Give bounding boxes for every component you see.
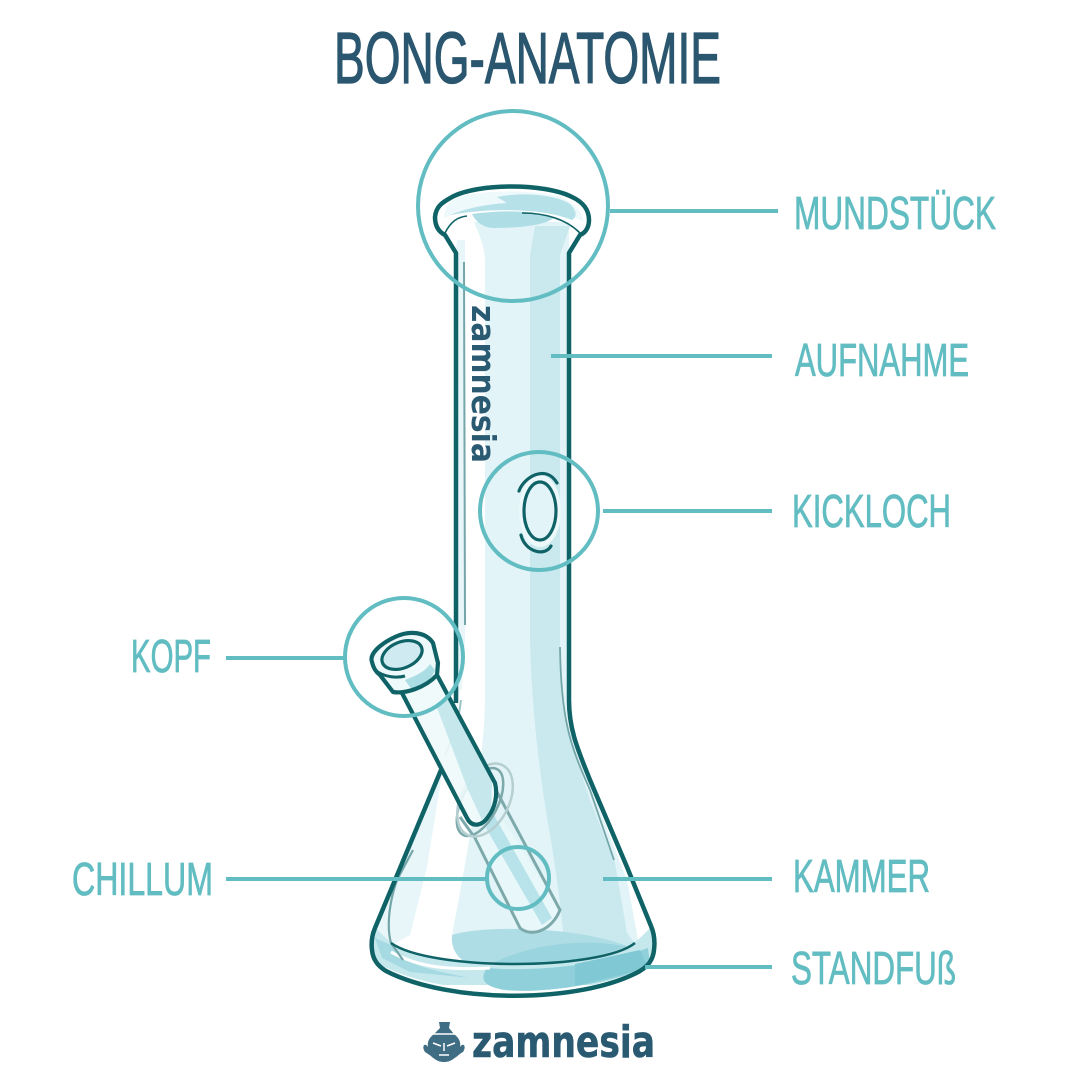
wordmark: zamnesia — [472, 1017, 655, 1068]
bowl — [372, 633, 438, 692]
callout: Kopf — [131, 598, 463, 716]
water pool — [452, 928, 626, 962]
callout: Aufnahme — [551, 334, 969, 386]
icon: mask — [423, 1022, 465, 1062]
callout: Kopf: KOPF — [131, 630, 211, 682]
callout: Kickloch: KICKLOCH — [792, 485, 951, 537]
light band — [452, 222, 640, 950]
callout: Mundstück: MUNDSTÜCK — [794, 187, 996, 239]
kickhole — [519, 473, 561, 552]
base inner line — [391, 943, 635, 964]
callout: Chillum — [72, 847, 549, 909]
callout: Standfuß: STANDFUß — [791, 942, 956, 994]
submerged stem and grommet — [446, 754, 560, 932]
dark band — [530, 226, 640, 950]
mouthpiece lip — [444, 192, 584, 222]
illustration: bong — [372, 186, 658, 996]
glass body fill — [372, 222, 658, 993]
callout: Mundstück — [418, 111, 996, 301]
inner glass lines — [464, 262, 465, 625]
chillum tube — [402, 675, 496, 825]
title: BONG-ANATOMIE — [334, 19, 721, 99]
left edge strip — [375, 240, 465, 945]
base ring — [374, 928, 652, 985]
callout: Chillum: CHILLUM — [72, 853, 213, 905]
callout: Aufnahme: AUFNAHME — [795, 334, 969, 386]
callout: Standfuß — [645, 942, 956, 994]
callout: Kickloch — [480, 452, 951, 570]
callout: Kammer — [603, 850, 930, 902]
logo — [423, 1017, 655, 1068]
brand text on tube: zamnesia — [464, 305, 503, 463]
bong outline — [372, 186, 654, 996]
callout: Kammer: KAMMER — [793, 850, 930, 902]
